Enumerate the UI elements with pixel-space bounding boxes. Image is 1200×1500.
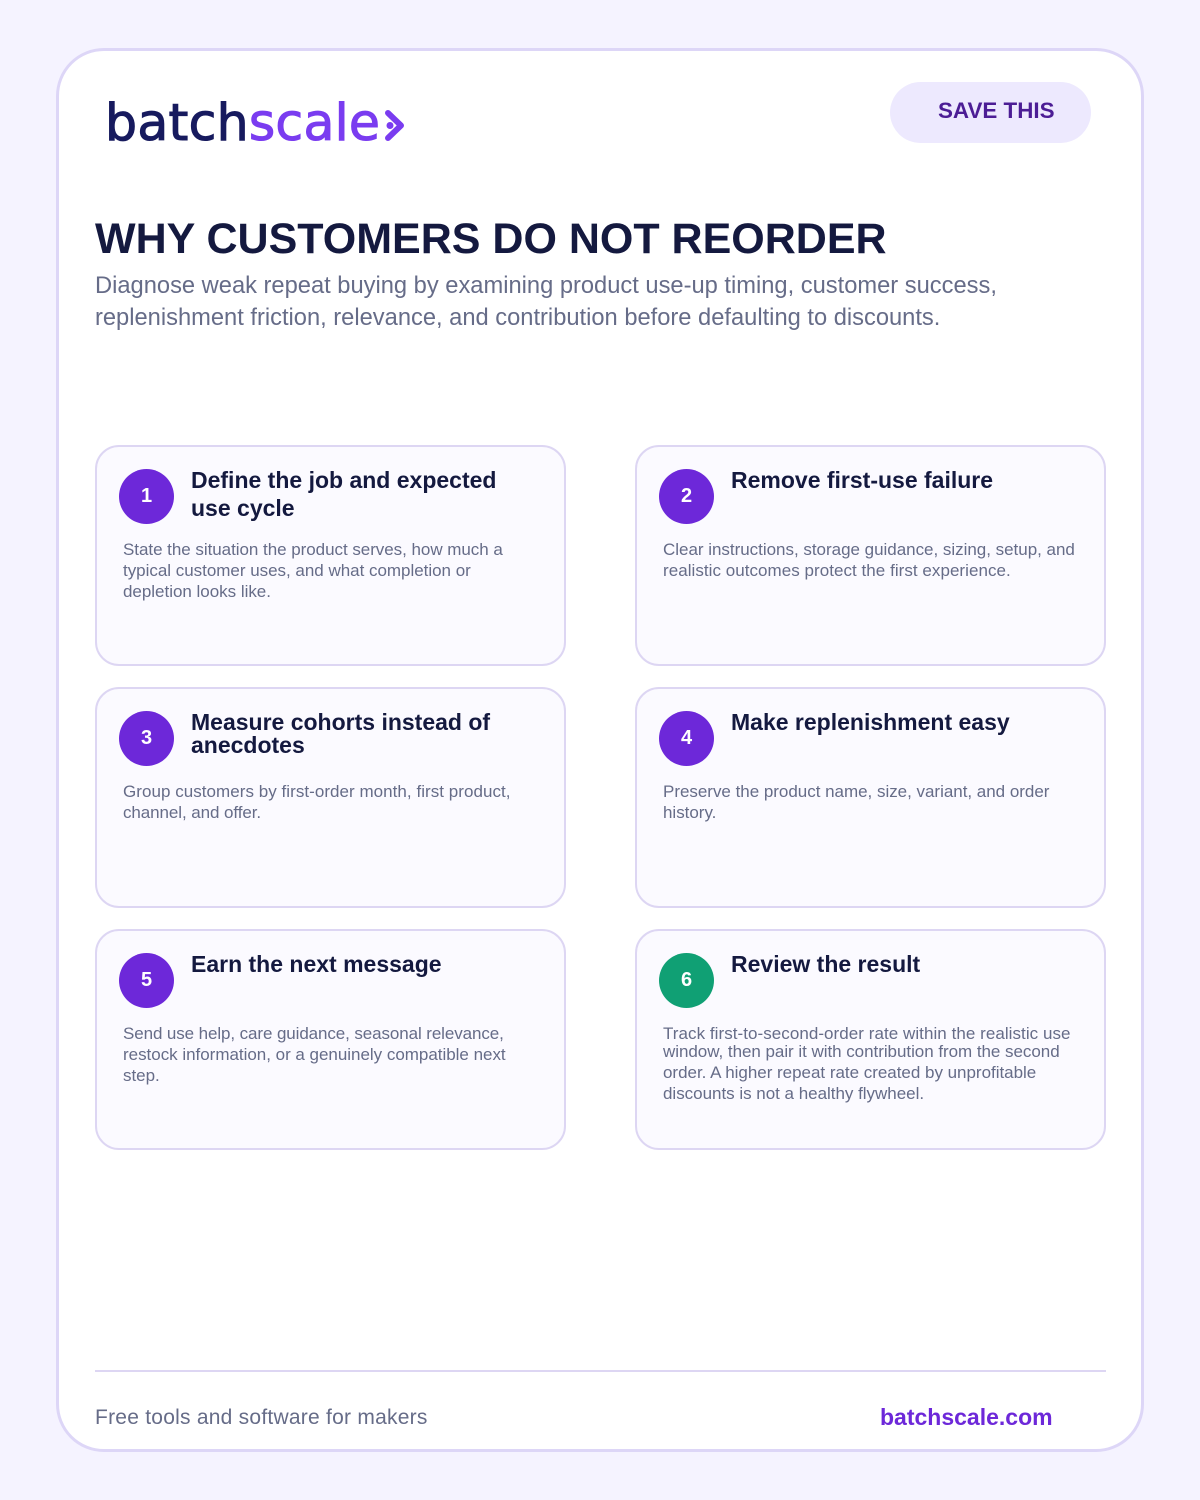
card 6 body: Track first-to-second-order rate within the realistic use xyxy=(663,1024,1071,1043)
number 6 xyxy=(659,953,714,1008)
number 3 xyxy=(119,711,174,766)
card 6 heading: Review the result xyxy=(731,951,920,977)
card 1 body xyxy=(123,540,503,601)
card 6 body: order. A higher repeat rate created by unprofitable xyxy=(663,1063,1036,1082)
number 4: 4 xyxy=(681,727,692,749)
card 6 xyxy=(635,929,1106,1150)
card 2 body: Clear instructions, storage guidance, sizing, setup, and xyxy=(663,540,1075,559)
number 5: 5 xyxy=(141,969,152,991)
card 1 heading xyxy=(191,467,496,521)
card 4 heading: Make replenishment easy xyxy=(731,709,1010,735)
subtitle xyxy=(95,273,997,331)
card 5 xyxy=(95,929,566,1150)
card 5 body: restock information, or a genuinely compatible next xyxy=(123,1045,506,1064)
card 4 body xyxy=(663,782,1050,822)
subtitle: replenishment friction, relevance, and contribution before defaulting to discounts. xyxy=(95,305,940,331)
footer link: batchscale.com xyxy=(880,1404,1053,1430)
logo: batchscale: batchscale xyxy=(105,93,380,152)
card 3 xyxy=(95,687,566,908)
card 1 body: depletion looks like. xyxy=(123,582,271,601)
card 6 body: discounts is not a healthy flywheel. xyxy=(663,1084,924,1103)
number 3: 3 xyxy=(141,727,152,749)
card 5 body: Send use help, care guidance, seasonal relevance, xyxy=(123,1024,504,1043)
card 6 body xyxy=(663,1024,1071,1103)
footer tagline: Free tools and software for makers xyxy=(95,1406,428,1429)
card 3 heading: Measure cohorts instead of xyxy=(191,709,490,735)
card 6 body: window, then pair it with contribution from the second xyxy=(663,1042,1060,1061)
number 4 xyxy=(659,711,714,766)
card 5 body: step. xyxy=(123,1066,160,1085)
card 2 body xyxy=(663,540,1075,580)
card 1 body: State the situation the product serves, how much a xyxy=(123,540,503,559)
subtitle: Diagnose weak repeat buying by examining product use-up timing, customer success, xyxy=(95,273,997,299)
card 4 body: Preserve the product name, size, variant, and order xyxy=(663,782,1049,801)
card 3 heading: anecdotes xyxy=(191,732,305,758)
number 2: 2 xyxy=(681,485,692,507)
number 6: 6 xyxy=(681,969,692,991)
card 3 body xyxy=(123,782,511,822)
save this badge: SAVE THIS xyxy=(938,98,1055,123)
card 3 body: channel, and offer. xyxy=(123,803,261,822)
card 5 body xyxy=(123,1024,506,1085)
card 4 body: history. xyxy=(663,803,716,822)
card 1 heading: use cycle xyxy=(191,495,295,521)
card 5 heading: Earn the next message xyxy=(191,951,442,977)
number 5 xyxy=(119,953,174,1008)
card 3 heading xyxy=(191,709,490,758)
title: WHY CUSTOMERS DO NOT REORDER xyxy=(95,215,887,263)
card 2 xyxy=(635,445,1106,666)
card 3 body: Group customers by first-order month, first product, xyxy=(123,782,511,801)
card 1 body: typical customer uses, and what completion or xyxy=(123,561,471,580)
card 1 heading: Define the job and expected xyxy=(191,467,496,493)
card 2 heading: Remove first-use failure xyxy=(731,467,993,493)
number 1: 1 xyxy=(141,485,152,507)
number 2 xyxy=(659,469,714,524)
card 1 xyxy=(95,445,566,666)
card 2 body: realistic outcomes protect the first experience. xyxy=(663,561,1011,580)
save this badge xyxy=(890,82,1091,143)
number 1 xyxy=(119,469,174,524)
card 4 xyxy=(635,687,1106,908)
